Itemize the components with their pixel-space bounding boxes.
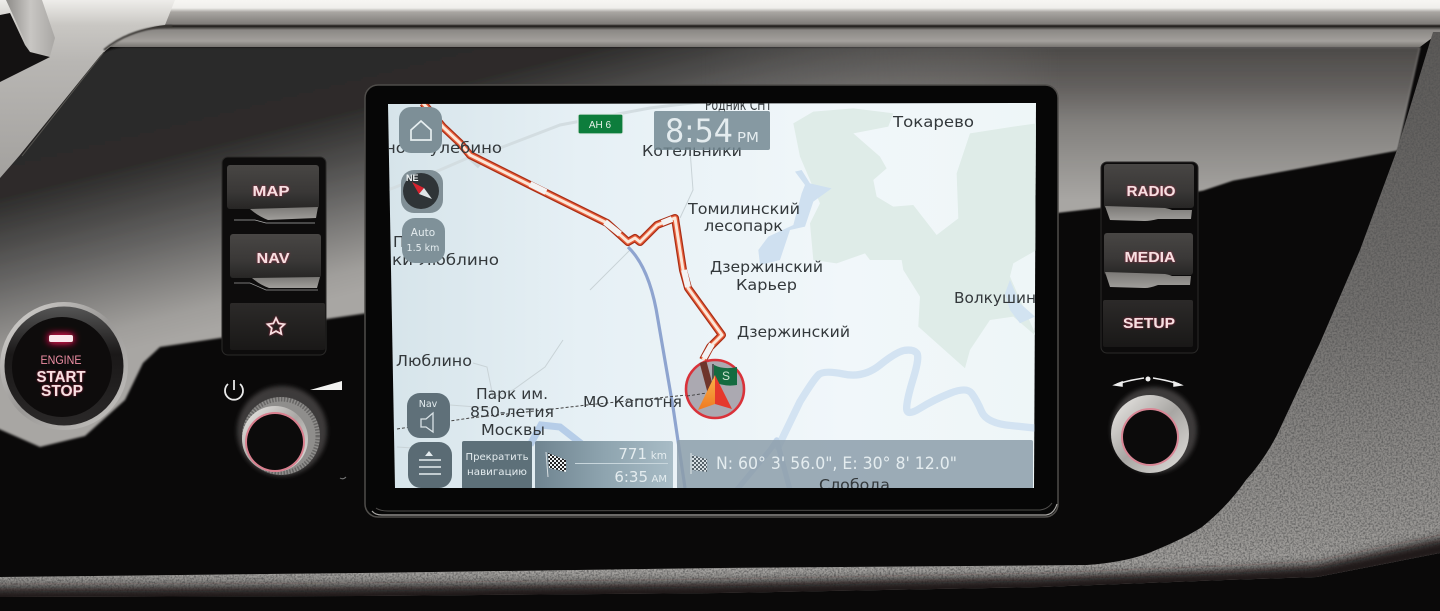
- menu button: [408, 442, 452, 488]
- engine start stop button: ENGINE: [40, 353, 82, 367]
- map place labels: Котельники: [642, 142, 742, 160]
- map place labels: Люблино: [396, 352, 472, 370]
- map place labels: Карьер: [736, 276, 797, 294]
- right button stack: [1101, 162, 1198, 353]
- map scale button: [402, 218, 445, 263]
- map place labels: но-Жулебино: [385, 139, 502, 157]
- route line: [423, 103, 722, 360]
- map place labels: Волкушин: [954, 289, 1036, 307]
- home button: [399, 107, 442, 153]
- compass button: [401, 170, 443, 213]
- RADIO button: RADIO: [1126, 183, 1176, 200]
- map place labels: Дзержинский: [737, 323, 850, 341]
- tuning arrows: [1115, 376, 1181, 386]
- vehicle position marker: [686, 360, 744, 418]
- small dash mark: [340, 477, 346, 479]
- MEDIA button: [1104, 233, 1193, 288]
- map place labels: П: [393, 233, 405, 251]
- label Sloboda: Слобода: [819, 476, 890, 494]
- distance and arrival panel: 6:35: [614, 468, 648, 486]
- map scale button: Auto: [411, 227, 435, 239]
- NAV button: NAV: [256, 250, 290, 267]
- NAV button: [230, 234, 321, 290]
- map place labels: [385, 96, 1036, 439]
- map place labels: Дзержинский: [710, 258, 823, 276]
- MAP button: [227, 165, 319, 223]
- clock panel: PM: [737, 131, 759, 146]
- lower water near bars: [530, 425, 583, 445]
- SETUP button: SETUP: [1123, 315, 1175, 332]
- volume wedge: [310, 381, 342, 390]
- map scale button: 1.5 km: [407, 243, 439, 254]
- compass button: NE: [406, 173, 419, 183]
- destination coordinates panel: N: 60° 3' 56.0", E: 30° 8' 12.0": [716, 454, 957, 474]
- steering column corner: [0, 0, 55, 82]
- power icon: [225, 380, 243, 400]
- navigation map screen: [385, 96, 1040, 494]
- distance and arrival panel: km: [651, 450, 667, 462]
- engine start stop button: STOP: [41, 383, 83, 400]
- map background: [385, 100, 1040, 492]
- vehicle position marker: S: [722, 369, 730, 383]
- clock panel: [654, 111, 770, 150]
- RADIO button: [1104, 164, 1194, 221]
- screen bezel: [365, 85, 1058, 517]
- stop navigation button: Прекратить: [466, 452, 529, 463]
- left control knob: [237, 386, 327, 476]
- map water: [758, 170, 1035, 440]
- engine start stop button: START: [36, 369, 86, 386]
- map place labels: лесопарк: [704, 217, 783, 235]
- engine start stop button: [0, 302, 128, 430]
- top trim band: [0, 0, 1440, 178]
- map place labels: Родник СНТ: [705, 96, 772, 114]
- distance and arrival panel: 771: [618, 445, 647, 463]
- road shield AH 6: [578, 114, 623, 134]
- map place labels: Томилинский: [687, 200, 800, 218]
- map forest areas: [793, 108, 1037, 368]
- nav volume button: Nav: [419, 399, 438, 410]
- map place labels: Москвы: [481, 421, 545, 439]
- distance and arrival panel: AM: [652, 474, 667, 485]
- map place labels: МО Капотня: [583, 393, 682, 411]
- map roads: [388, 102, 720, 488]
- map place labels: Токарево: [892, 113, 974, 131]
- MEDIA button: MEDIA: [1124, 249, 1176, 266]
- stop navigation button: [462, 441, 532, 489]
- map place labels: Парк им.: [476, 385, 548, 403]
- map place labels: ки-Люблино: [392, 251, 499, 269]
- glossy panel reflection: [0, 47, 1420, 447]
- clock panel: 8:54: [665, 112, 733, 150]
- road shield AH 6: АН 6: [589, 120, 612, 131]
- left button stack: [222, 157, 326, 355]
- nav volume button: [407, 393, 450, 438]
- MAP button: MAP: [252, 183, 290, 200]
- map place labels: 850-летия: [470, 403, 554, 421]
- right control knob: [1111, 387, 1197, 473]
- SETUP button: [1103, 300, 1193, 347]
- distance and arrival panel: [535, 441, 673, 489]
- favorites star button: [230, 303, 325, 350]
- destination coordinates panel: [677, 440, 1033, 489]
- stop navigation button: навигацию: [467, 467, 527, 478]
